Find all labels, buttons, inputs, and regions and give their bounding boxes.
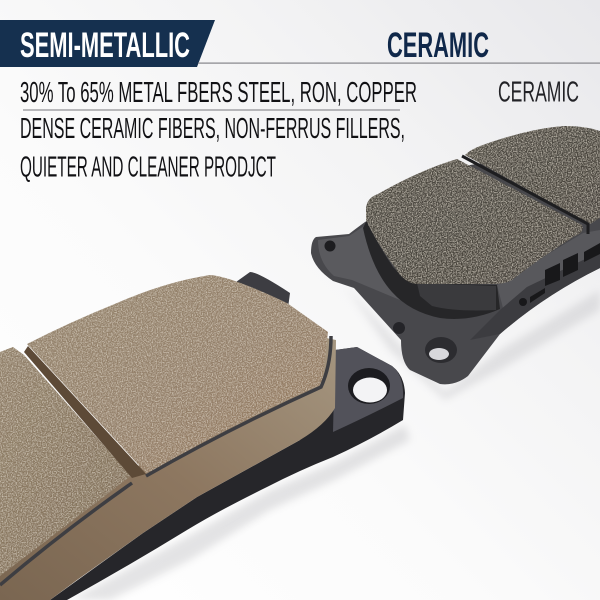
friction surface: second segment [0,347,131,576]
friction block side: semi-metallic [0,338,336,600]
text divider [23,110,400,111]
backing plate: ceramic [311,145,600,384]
mounting hole: semi-metallic [348,368,390,404]
ceramic brake pad photo [311,126,600,400]
backing plate tab: top [236,272,290,308]
semi-metallic brake pad photo [0,272,410,600]
friction surface: first segment [27,275,328,474]
backing plate: semi-metallic [50,340,405,600]
banner: semi-metallic heading: SEMI-METALLIC [20,26,190,65]
text block: quieter line: QUIETER AND CLEANER PRODJCT [20,152,276,184]
heading rule [198,62,600,64]
friction block side: ceramic [363,220,500,319]
friction surface: ceramic second segment [465,126,600,224]
gray band under friction edge [497,230,600,308]
lower plate rim [470,252,600,340]
slots in plate side [519,243,600,306]
shim line [146,336,331,476]
plate mounting hole [425,337,457,363]
friction surface: ceramic first segment [366,159,583,284]
banner: semi-metallic heading [0,20,215,67]
heading: ceramic: CERAMIC [387,26,489,65]
